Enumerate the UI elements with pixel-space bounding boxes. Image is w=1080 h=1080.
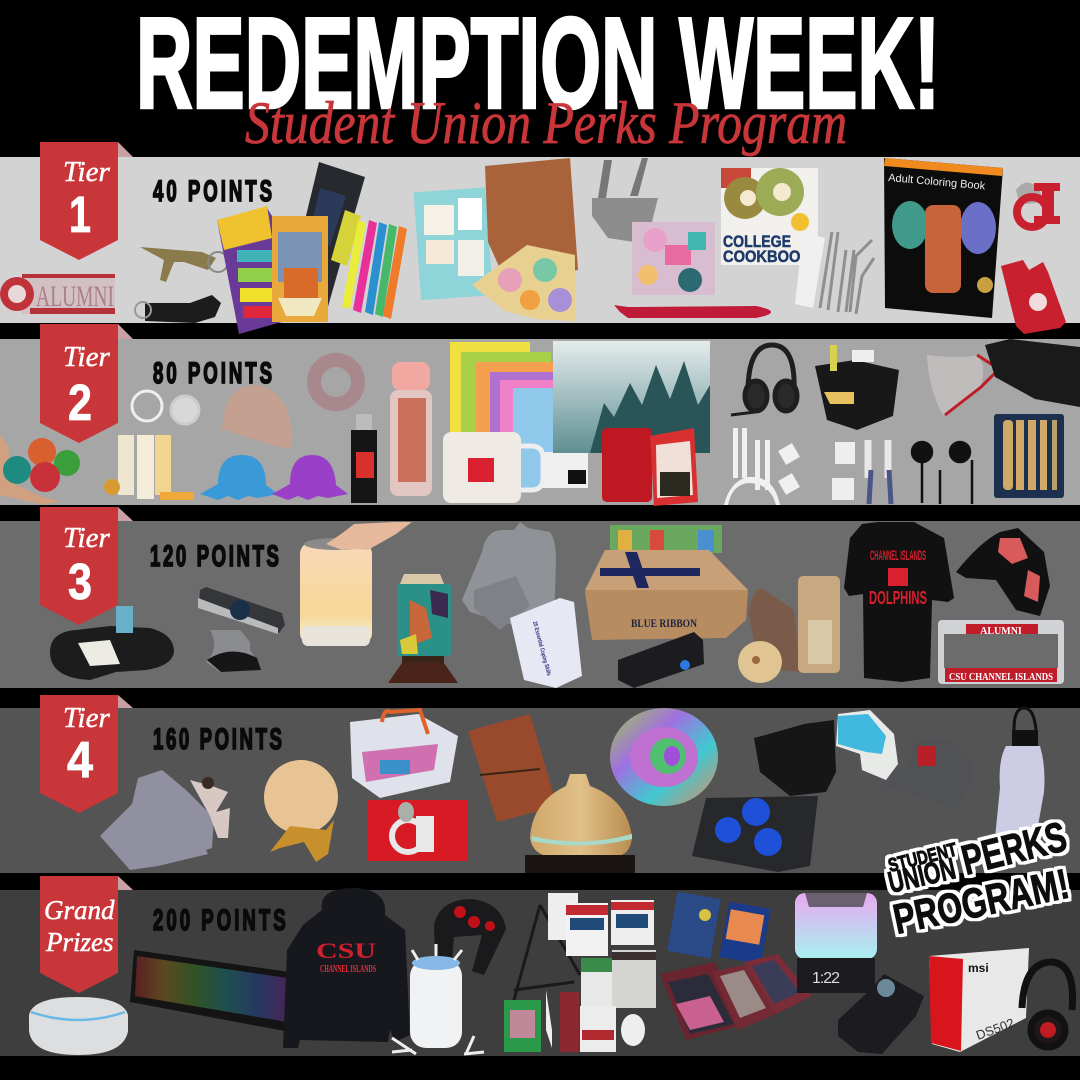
snack box: BLUE RIBBON: [631, 616, 697, 630]
sticker: student union perks program: STUDENT: [886, 839, 959, 877]
highlighters: [342, 220, 407, 319]
paint supplies: [546, 950, 656, 1052]
ribbon: tier 3: 3: [68, 553, 92, 610]
power bank: [618, 632, 704, 688]
snack box: [585, 525, 748, 640]
coloring book: [884, 158, 1003, 318]
canvases: [548, 893, 654, 956]
water bottle: [994, 708, 1044, 848]
points label: 120: 120 POINTS: [150, 540, 279, 573]
sticker: student union perks program: UNION: [885, 852, 959, 900]
phone wallet: [1001, 260, 1066, 334]
license plate frame: CSU CHANNEL ISLANDS: [949, 671, 1053, 683]
craft kit: [350, 710, 458, 798]
adulting planner: [414, 187, 493, 300]
ribbon: tier 1: 1: [69, 186, 91, 243]
headset: [731, 345, 797, 415]
license plate frame: [938, 620, 1064, 684]
leather journal: [468, 714, 557, 822]
band: tier 2: [0, 339, 1080, 505]
ribbon: tier 1: Tier: [63, 156, 110, 188]
cookbook: [721, 168, 818, 266]
MSI box: msi: [968, 961, 989, 975]
MSI box: [929, 948, 1029, 1052]
seat cushion: [754, 720, 836, 796]
cookbook: COLLEGE: [723, 232, 791, 251]
tier 4 products: [100, 708, 1044, 873]
water bottle: [390, 362, 432, 496]
tier 2 products: [0, 339, 1080, 506]
earbuds: [912, 442, 972, 504]
ribbon: tier 1: [40, 142, 133, 260]
tabs: [217, 206, 289, 334]
smart speaker: [29, 997, 128, 1055]
ribbon: tier 2: Tier: [63, 341, 110, 373]
leather planner: [485, 158, 578, 282]
weighted blanket: [100, 770, 230, 870]
masks: [956, 528, 1050, 616]
charging set: [832, 440, 891, 504]
ribbon: tier 4: Tier: [63, 702, 110, 734]
tapestry: [553, 341, 710, 453]
coloring book: Adult Coloring Book: [888, 172, 986, 193]
band: tier 4: [0, 708, 1080, 873]
bamboo cutlery: [994, 414, 1064, 498]
mosaic wax warmer: [388, 574, 458, 683]
cookbook: COOKBOOK: [723, 247, 812, 266]
dolphins shirt: DOLPHINS: [869, 588, 927, 608]
lanyard: [614, 305, 771, 318]
mug: [443, 432, 543, 503]
tier 3 products: [50, 522, 1064, 688]
burrito wrap tube: [798, 576, 840, 673]
lotion tubes set: [104, 435, 194, 500]
charger cables: [724, 428, 800, 505]
sticker sheets: [472, 245, 575, 321]
band: grand prizes: [0, 890, 1080, 1056]
points label: 40: 40 POINTS: [153, 175, 272, 208]
starry night pads: [667, 892, 771, 964]
hoodie: [283, 888, 410, 1048]
sticker: student union perks program: [885, 812, 1073, 943]
stickers: [632, 222, 715, 295]
grand prize products: [29, 888, 1073, 1055]
CI logo: [1016, 182, 1060, 227]
gel pens: [285, 162, 365, 317]
points label: 200: 200 POINTS: [153, 904, 286, 937]
webcam: [198, 587, 285, 672]
desk organizer: [815, 345, 899, 430]
flag: [367, 800, 468, 861]
keychain tool: [140, 247, 228, 282]
subtitle: Student Union Perks Program: [245, 90, 847, 156]
air purifier: [392, 944, 484, 1054]
study card: [510, 598, 582, 688]
moon lamp: [264, 760, 338, 862]
scrunchies: [314, 360, 358, 404]
backpack: [462, 522, 556, 630]
ribbon: tier 2: [40, 324, 133, 443]
ribbon: tier 4: [40, 695, 133, 813]
octopus purple: [272, 455, 348, 500]
cap: [880, 740, 974, 810]
ribbon: grand prizes: Grand: [44, 895, 115, 925]
notebooks: [450, 342, 588, 488]
tier 1 products: [0, 158, 1066, 334]
car organizer: [985, 339, 1080, 407]
essential oil bottles: [525, 855, 635, 873]
gaming headset: [1022, 962, 1073, 1047]
face mask: [927, 355, 999, 415]
alumni plate: [0, 274, 115, 314]
straws: [795, 232, 874, 314]
MSI box: DS502: [974, 1015, 1016, 1043]
band: tier 1: [0, 157, 1080, 323]
pencils: [272, 216, 328, 322]
organizer bag: [592, 158, 658, 242]
dolphins shirt: [844, 522, 954, 682]
alarm speaker: [795, 893, 877, 993]
hoodie: CSU: [316, 938, 376, 963]
band: tier 3: [0, 521, 1080, 688]
art case: [660, 954, 812, 1040]
points label: 160: 160 POINTS: [153, 723, 282, 756]
beanie: [222, 385, 292, 450]
ribbon: grand prizes: Prizes: [45, 927, 114, 957]
RGB keyboard: [130, 950, 290, 1032]
hoodie: CHANNEL ISLANDS: [320, 963, 376, 975]
easel: [514, 905, 580, 1000]
LED strip: [610, 708, 718, 806]
acrylic pad: [504, 1000, 541, 1052]
study card: 25 Essential Coping Skills: [531, 621, 551, 677]
carabiner: [135, 295, 221, 323]
lap desk: [50, 606, 174, 680]
ribbon: grand prizes: [40, 876, 133, 993]
ribbon: tier 2: 2: [68, 374, 92, 431]
burrito bag: [738, 588, 800, 683]
alumni plate: ALUMNI: [36, 280, 114, 313]
diffuser: [530, 774, 632, 856]
alarm speaker: 1:22: [812, 970, 840, 987]
ribbon: tier 4: 4: [67, 731, 94, 788]
usb drive: [351, 414, 377, 503]
gel pillow: [836, 710, 898, 780]
points label: 80: 80 POINTS: [153, 357, 272, 390]
laptop cooler: [692, 796, 818, 872]
octopus blue: [200, 455, 278, 500]
earbuds case: [838, 974, 924, 1054]
lunch box: [602, 428, 698, 506]
stress balls: [0, 435, 80, 505]
massager: [434, 899, 506, 987]
dolphins shirt: CHANNEL ISLANDS: [870, 547, 926, 563]
ribbon: tier 3: Tier: [63, 522, 110, 554]
touch lamp: [300, 522, 412, 646]
license plate frame: ALUMNI: [980, 626, 1022, 637]
ribbon: tier 3: [40, 507, 133, 625]
keychain: [132, 391, 199, 424]
